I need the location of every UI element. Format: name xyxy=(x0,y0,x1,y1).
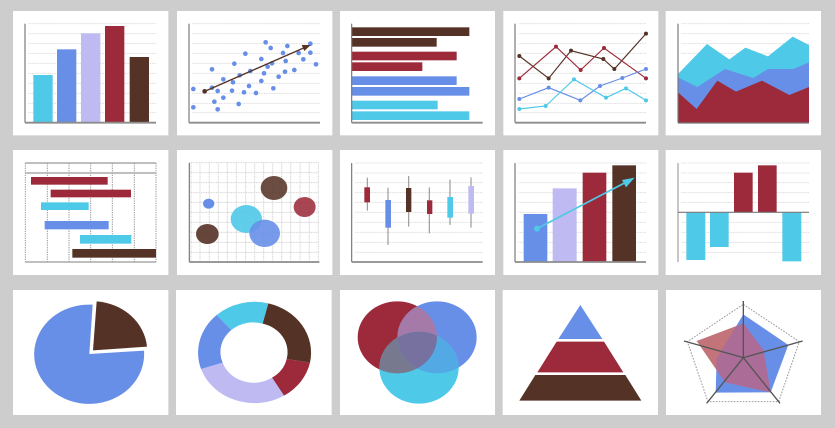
gantt bars xyxy=(31,177,156,258)
panel: line chart xyxy=(503,11,658,135)
panel: venn diagram xyxy=(340,290,495,415)
scatter dots xyxy=(191,40,318,112)
panel: pyramid xyxy=(503,290,658,415)
horizontal bars xyxy=(352,27,469,120)
panel: scatter plot xyxy=(177,11,332,135)
candlesticks xyxy=(364,176,474,245)
panel: pie chart xyxy=(13,290,168,415)
panel: gantt chart xyxy=(13,150,168,275)
pyramid middle tier xyxy=(537,342,623,372)
donut segments xyxy=(198,302,311,403)
panel: column chart with trend arrow xyxy=(503,150,658,275)
line series: brown xyxy=(517,32,648,80)
pyramid bottom tier xyxy=(519,375,641,401)
pie main slice xyxy=(34,305,144,404)
diverging bars xyxy=(686,165,801,261)
panel: column chart xyxy=(13,11,168,135)
radar plot xyxy=(684,301,803,403)
panel: positive and negative bars xyxy=(666,150,821,275)
line series: red xyxy=(517,45,648,80)
bubbles xyxy=(196,176,316,247)
panel: horizontal bar chart xyxy=(340,11,495,135)
panel: donut chart xyxy=(176,290,332,415)
line series: cyan xyxy=(517,77,648,111)
arrow: growth trend xyxy=(534,178,635,232)
pie exploded slice xyxy=(93,301,147,350)
line series: blue xyxy=(517,67,648,102)
venn circles xyxy=(358,301,477,404)
panel: area chart xyxy=(666,11,821,135)
panel: bubble chart xyxy=(177,150,332,275)
stacked areas xyxy=(678,37,809,123)
panel: radar chart xyxy=(666,290,821,415)
column bars xyxy=(33,26,149,123)
panel: candlestick chart xyxy=(340,150,495,275)
pyramid top tier xyxy=(558,305,602,339)
rising columns xyxy=(524,165,636,262)
arrow: scatter trend xyxy=(202,45,311,94)
